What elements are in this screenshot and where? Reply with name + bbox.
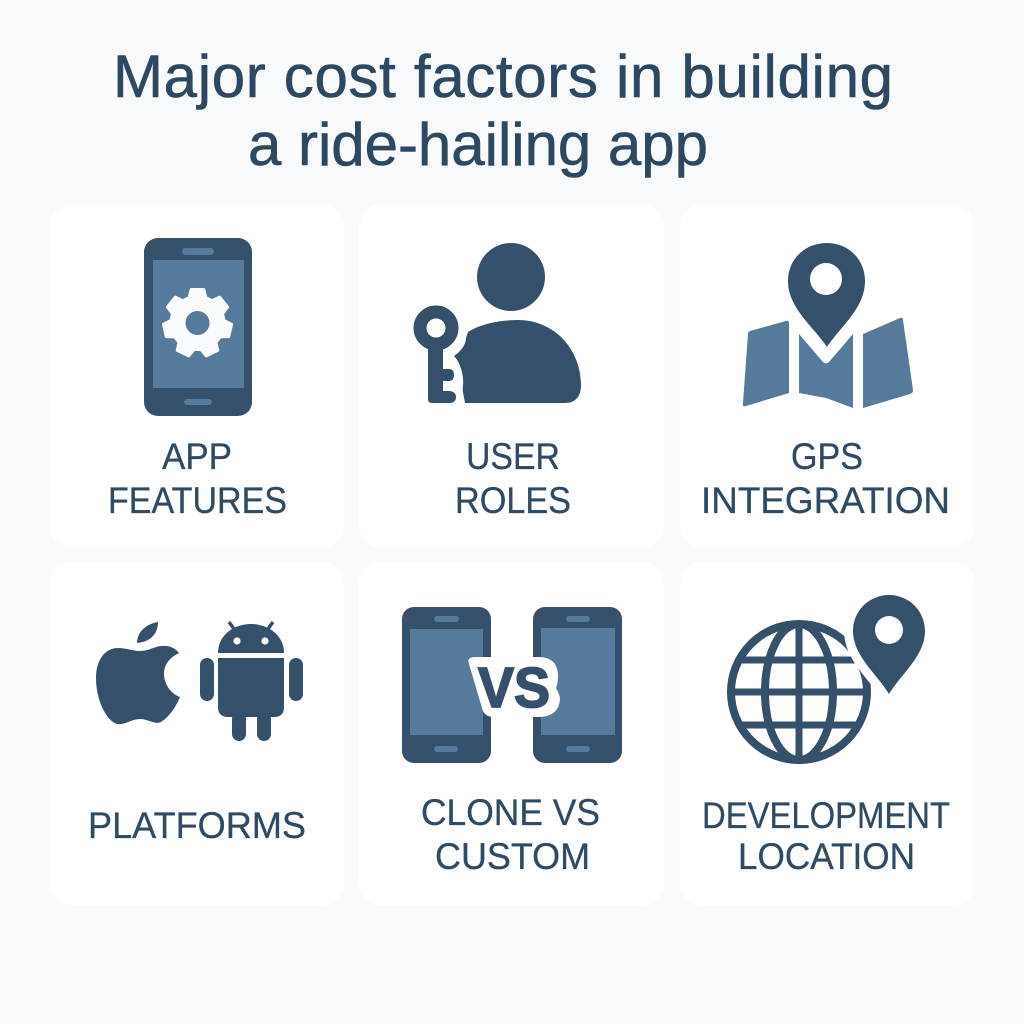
label: user roles: ROLES — [455, 480, 571, 521]
label: app features: APP — [162, 436, 232, 477]
title: Major cost factors in building — [113, 43, 893, 110]
icon: globe with pin — [731, 595, 925, 760]
label: development location — [702, 795, 950, 877]
icon: apple logo — [96, 622, 180, 724]
title: a ride-hailing app — [248, 111, 708, 178]
label: user roles — [455, 436, 571, 521]
icon: user with key — [420, 243, 581, 403]
panel: platforms — [50, 562, 344, 905]
label: clone vs custom: CUSTOM — [435, 836, 590, 877]
icon: two phones versus: VS — [478, 656, 550, 720]
label: gps integration — [701, 436, 950, 521]
label: development location: LOCATION — [738, 836, 915, 877]
label: gps integration: INTEGRATION — [701, 480, 950, 521]
label: app features: FEATURES — [108, 480, 287, 521]
panel: clone vs custom — [359, 562, 664, 905]
panel: app features — [50, 205, 344, 547]
label: app features — [108, 436, 287, 521]
label: clone vs custom — [421, 792, 600, 877]
panel: development location — [680, 562, 975, 905]
icon: two phones versus — [402, 607, 622, 763]
label: development location: DEVELOPMENT — [702, 795, 950, 836]
panel: user roles — [359, 205, 664, 547]
panel: gps integration — [680, 205, 975, 547]
icon: android logo — [200, 622, 303, 741]
label: gps integration: GPS — [791, 436, 863, 477]
label: user roles: USER — [466, 436, 560, 477]
label: clone vs custom: CLONE VS — [421, 792, 600, 833]
icon: phone with gear — [144, 238, 252, 416]
title — [113, 43, 893, 178]
icon: map with pin — [743, 243, 913, 408]
label: platforms: PLATFORMS — [88, 805, 306, 846]
